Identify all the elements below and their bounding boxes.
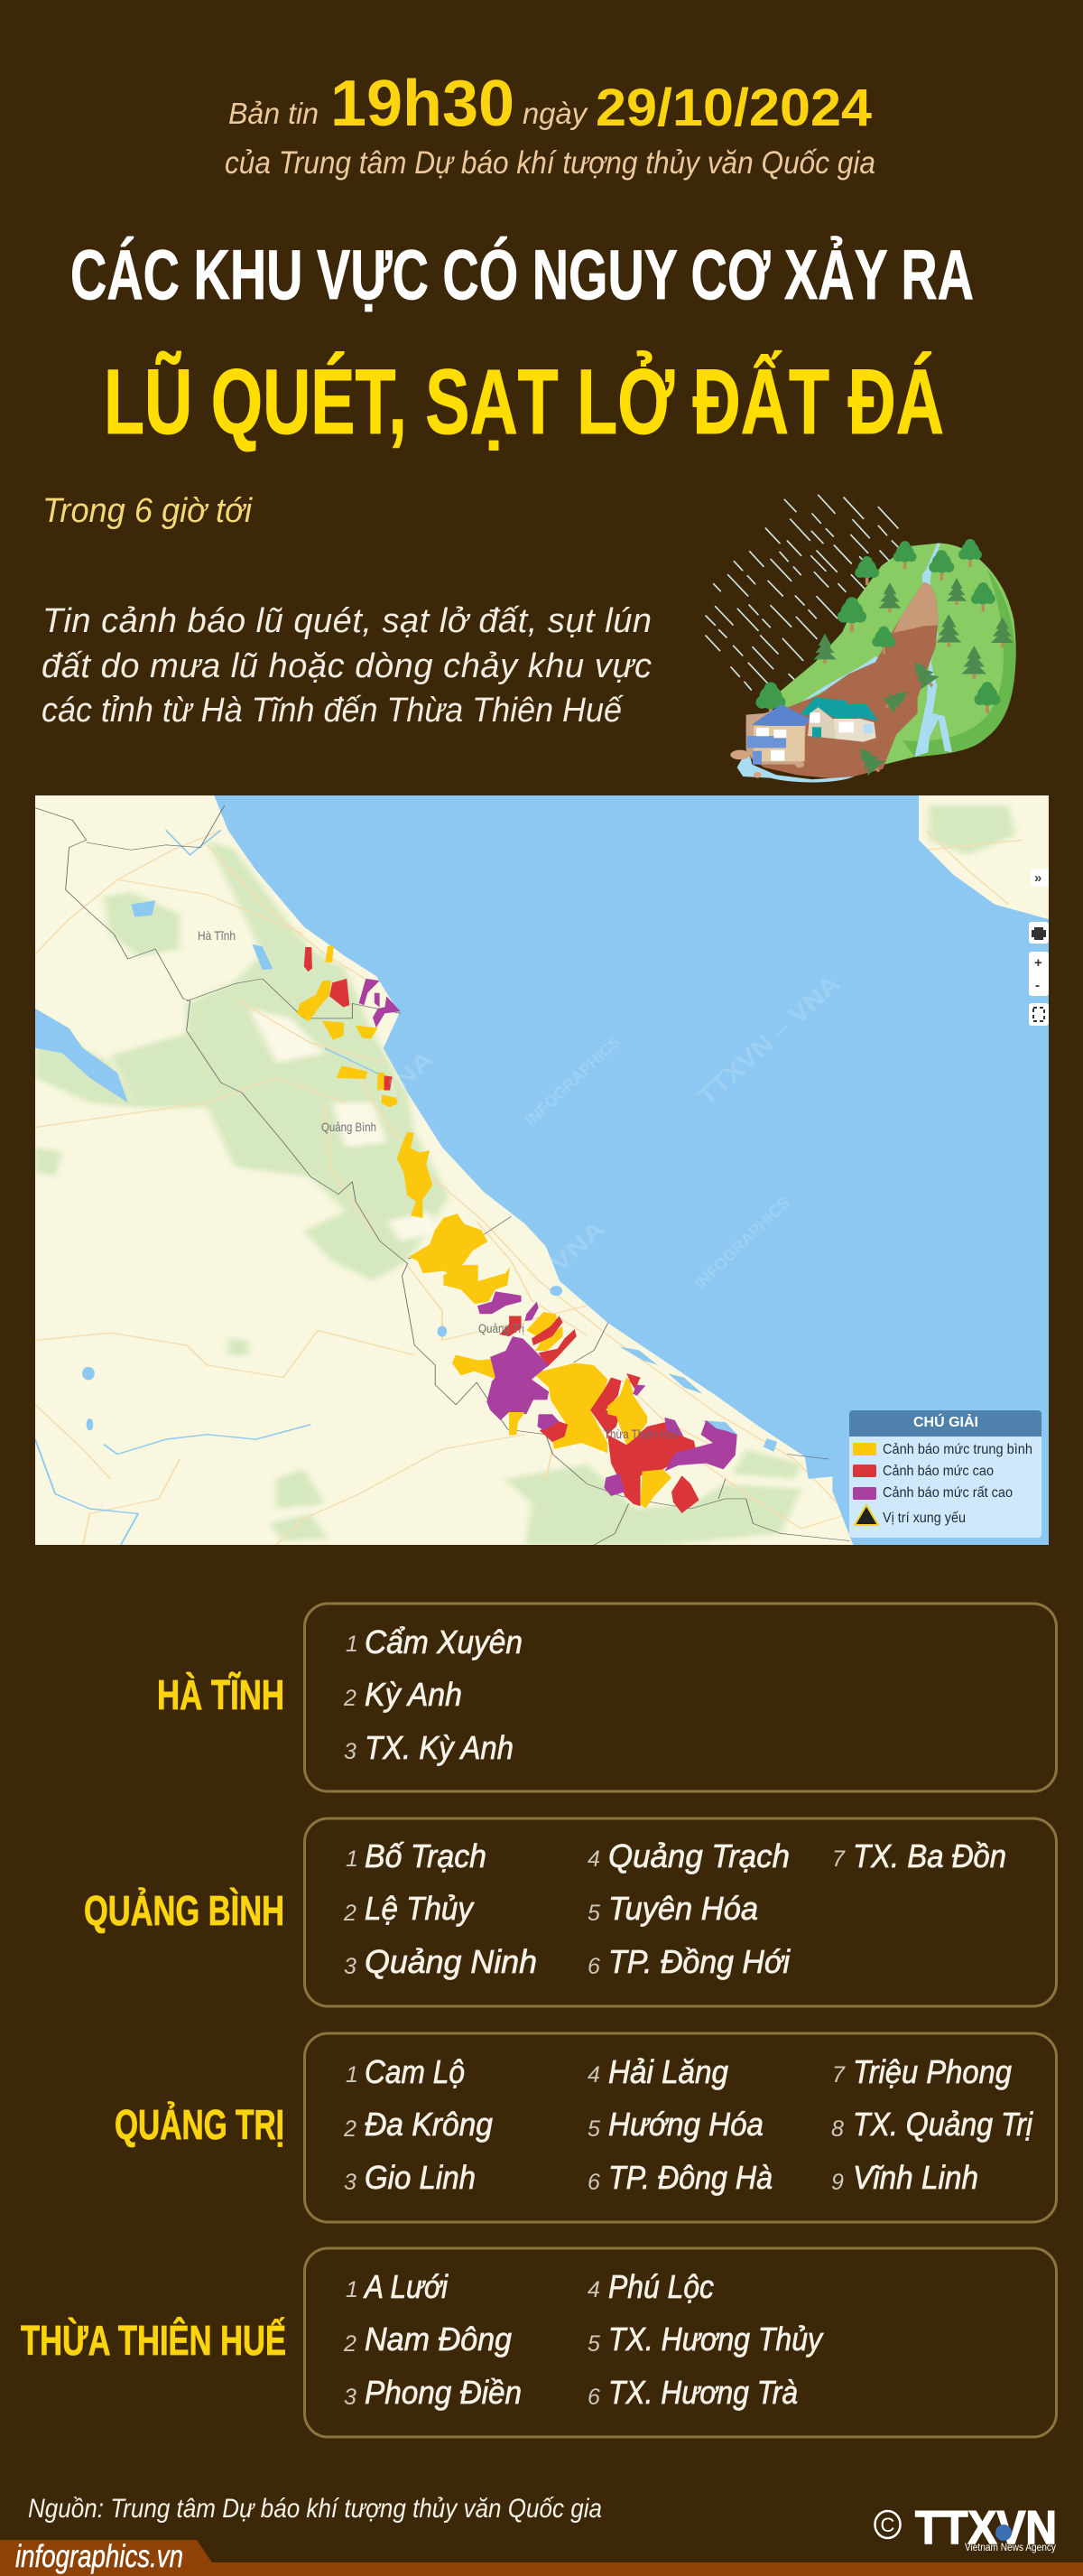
panel: Thừa Thiên Huế: 5 xyxy=(588,2331,600,2357)
map legend: Cảnh báo mức cao xyxy=(883,1464,994,1479)
panel: Hà Tĩnh: Cẩm Xuyên xyxy=(365,1623,523,1660)
panel: Quảng Trị: 2 xyxy=(343,2116,356,2142)
panel: Quảng Bình xyxy=(84,1818,1056,2006)
panel: Quảng Trị: Triệu Phong xyxy=(853,2053,1012,2090)
panel: Thừa Thiên Huế: A Lưới xyxy=(363,2268,449,2305)
panel: Quảng Trị: 5 xyxy=(588,2116,600,2142)
panel: Hà Tĩnh: HÀ TĨNH xyxy=(157,1671,284,1718)
map panel: Quảng Trị xyxy=(478,1321,524,1335)
title xyxy=(70,235,974,453)
panel: Quảng Trị: QUẢNG TRỊ xyxy=(115,2101,284,2148)
panel: Quảng Bình: Lệ Thủy xyxy=(365,1890,475,1927)
panel: Quảng Bình: 4 xyxy=(588,1846,600,1872)
panel: Quảng Bình: TX. Ba Đồn xyxy=(853,1837,1006,1874)
map panel: Hà Tĩnh xyxy=(198,928,236,943)
map panel: VNA xyxy=(374,1045,439,1107)
map panel: INFOGRAPHICS xyxy=(522,1033,624,1130)
panel: Quảng Trị: 6 xyxy=(588,2170,600,2195)
panel: Hà Tĩnh: 3 xyxy=(344,1739,356,1764)
bulletin time header: Bản tin xyxy=(228,97,319,130)
panel: Hà Tĩnh xyxy=(157,1604,1056,1791)
panel: Quảng Bình: 1 xyxy=(346,1846,358,1872)
panel: Quảng Trị: Hải Lăng xyxy=(608,2053,728,2090)
panel: Quảng Bình: 3 xyxy=(344,1954,356,1979)
panel: Thừa Thiên Huế xyxy=(21,2248,1056,2437)
source note: Nguồn: Trung tâm Dự báo khí tượng thủy văn Quốc gia xyxy=(28,2494,602,2524)
panel: Thừa Thiên Huế: Phong Điền xyxy=(365,2374,522,2411)
bulletin time header: 19h30 xyxy=(330,68,514,140)
map panel: INFOGRAPHICS xyxy=(691,1194,793,1293)
panel: Thừa Thiên Huế: TX. Hương Trà xyxy=(608,2374,798,2411)
map panel xyxy=(35,795,1049,1545)
panel: Quảng Trị: 4 xyxy=(588,2062,600,2088)
panel: Quảng Bình: 2 xyxy=(343,1901,356,1926)
map legend: Vị trí xung yếu xyxy=(883,1511,966,1526)
subheading: time frame: Trong 6 giờ tới xyxy=(42,492,253,530)
bulletin time header: ngày xyxy=(523,97,588,130)
panel: Quảng Trị: 9 xyxy=(831,2170,844,2195)
panel: Quảng Trị: Cam Lộ xyxy=(365,2053,465,2090)
panel: Quảng Bình: Quảng Trạch xyxy=(608,1837,790,1874)
panel: Hà Tĩnh: TX. Kỳ Anh xyxy=(365,1729,514,1766)
panel: Quảng Bình: Tuyên Hóa xyxy=(608,1890,758,1927)
map controls: + xyxy=(1034,955,1042,971)
panel: Thừa Thiên Huế: Phú Lộc xyxy=(608,2268,714,2305)
map legend xyxy=(849,1410,1041,1538)
panel: Thừa Thiên Huế: TX. Hương Thủy xyxy=(608,2320,824,2357)
panel: Hà Tĩnh: 2 xyxy=(343,1686,356,1711)
panel: Quảng Bình: TP. Đồng Hới xyxy=(608,1943,791,1980)
icon: landslide illustration xyxy=(706,495,1016,782)
panel: Thừa Thiên Huế: 3 xyxy=(344,2385,356,2410)
bulletin time header xyxy=(225,68,875,181)
bulletin time header: 29/10/2024 xyxy=(596,79,872,137)
text block: warning description: đất do mưa lũ hoặc dòng chảy khu vực xyxy=(42,647,652,685)
panel: Thừa Thiên Huế: 1 xyxy=(346,2277,358,2302)
map legend: Cảnh báo mức rất cao xyxy=(883,1485,1013,1501)
panel: Quảng Bình: Bố Trạch xyxy=(365,1837,486,1874)
bulletin time header: của Trung tâm Dự báo khí tượng thủy văn Quốc gia xyxy=(225,145,875,181)
panel: Hà Tĩnh: Kỳ Anh xyxy=(365,1676,462,1713)
panel: Quảng Trị: TP. Đông Hà xyxy=(608,2159,773,2196)
panel: Quảng Bình: 6 xyxy=(588,1954,600,1979)
panel: Quảng Trị: Đa Krông xyxy=(365,2106,493,2143)
warning zones xyxy=(297,946,737,1513)
panel: Thừa Thiên Huế: 2 xyxy=(343,2331,356,2357)
text block: warning description xyxy=(42,602,652,730)
map controls xyxy=(1029,869,1049,1026)
panel: Quảng Trị: TX. Quảng Trị xyxy=(853,2106,1033,2143)
panel: Quảng Bình: 5 xyxy=(588,1901,600,1926)
panel: Quảng Trị: 3 xyxy=(344,2170,356,2195)
map legend: Cảnh báo mức trung bình xyxy=(883,1442,1032,1457)
panel: Quảng Bình: Quảng Ninh xyxy=(365,1943,537,1980)
text block: warning description: Tin cảnh báo lũ quét, sạt lở đất, sụt lún xyxy=(42,602,652,640)
panel: Thừa Thiên Huế: 6 xyxy=(588,2385,600,2410)
logo: TTXVN: C xyxy=(881,2514,895,2536)
logo: TTXVN: TTXVN xyxy=(915,2502,1057,2554)
logo: TTXVN: Vietnam News Agency xyxy=(965,2543,1056,2553)
panel: Quảng Trị: Gio Linh xyxy=(365,2159,476,2196)
map panel: TTXVN – VNA xyxy=(692,970,846,1111)
footer band with site name: infographics.vn xyxy=(15,2539,183,2574)
map controls: » xyxy=(1034,870,1041,886)
map panel: Quảng Bình xyxy=(321,1120,376,1134)
map panel: VNA xyxy=(545,1214,610,1277)
footer band with site name xyxy=(0,2539,1083,2576)
panel: Thừa Thiên Huế: THỪA THIÊN HUẾ xyxy=(21,2317,286,2364)
panel: Quảng Trị: 8 xyxy=(831,2116,844,2142)
map controls: - xyxy=(1035,978,1040,993)
panel: Quảng Trị: 7 xyxy=(832,2062,846,2088)
panel: Quảng Trị: Vĩnh Linh xyxy=(853,2159,978,2196)
panel: Quảng Bình: QUẢNG BÌNH xyxy=(84,1887,284,1934)
panel: Quảng Bình: 7 xyxy=(832,1846,846,1872)
panel: Quảng Trị xyxy=(115,2033,1056,2222)
panel: Thừa Thiên Huế: Nam Đông xyxy=(365,2320,512,2357)
map panel: Thừa Thiên Huế xyxy=(604,1427,680,1441)
panel: Thừa Thiên Huế: 4 xyxy=(588,2277,600,2302)
panel: Quảng Trị: 1 xyxy=(346,2062,358,2088)
text block: warning description: các tỉnh từ Hà Tĩnh đến Thừa Thiên Huế xyxy=(42,692,625,730)
map legend: CHÚ GIẢI xyxy=(913,1413,978,1430)
panel: Quảng Trị: Hướng Hóa xyxy=(608,2106,764,2143)
panel: Hà Tĩnh: 1 xyxy=(346,1632,358,1657)
